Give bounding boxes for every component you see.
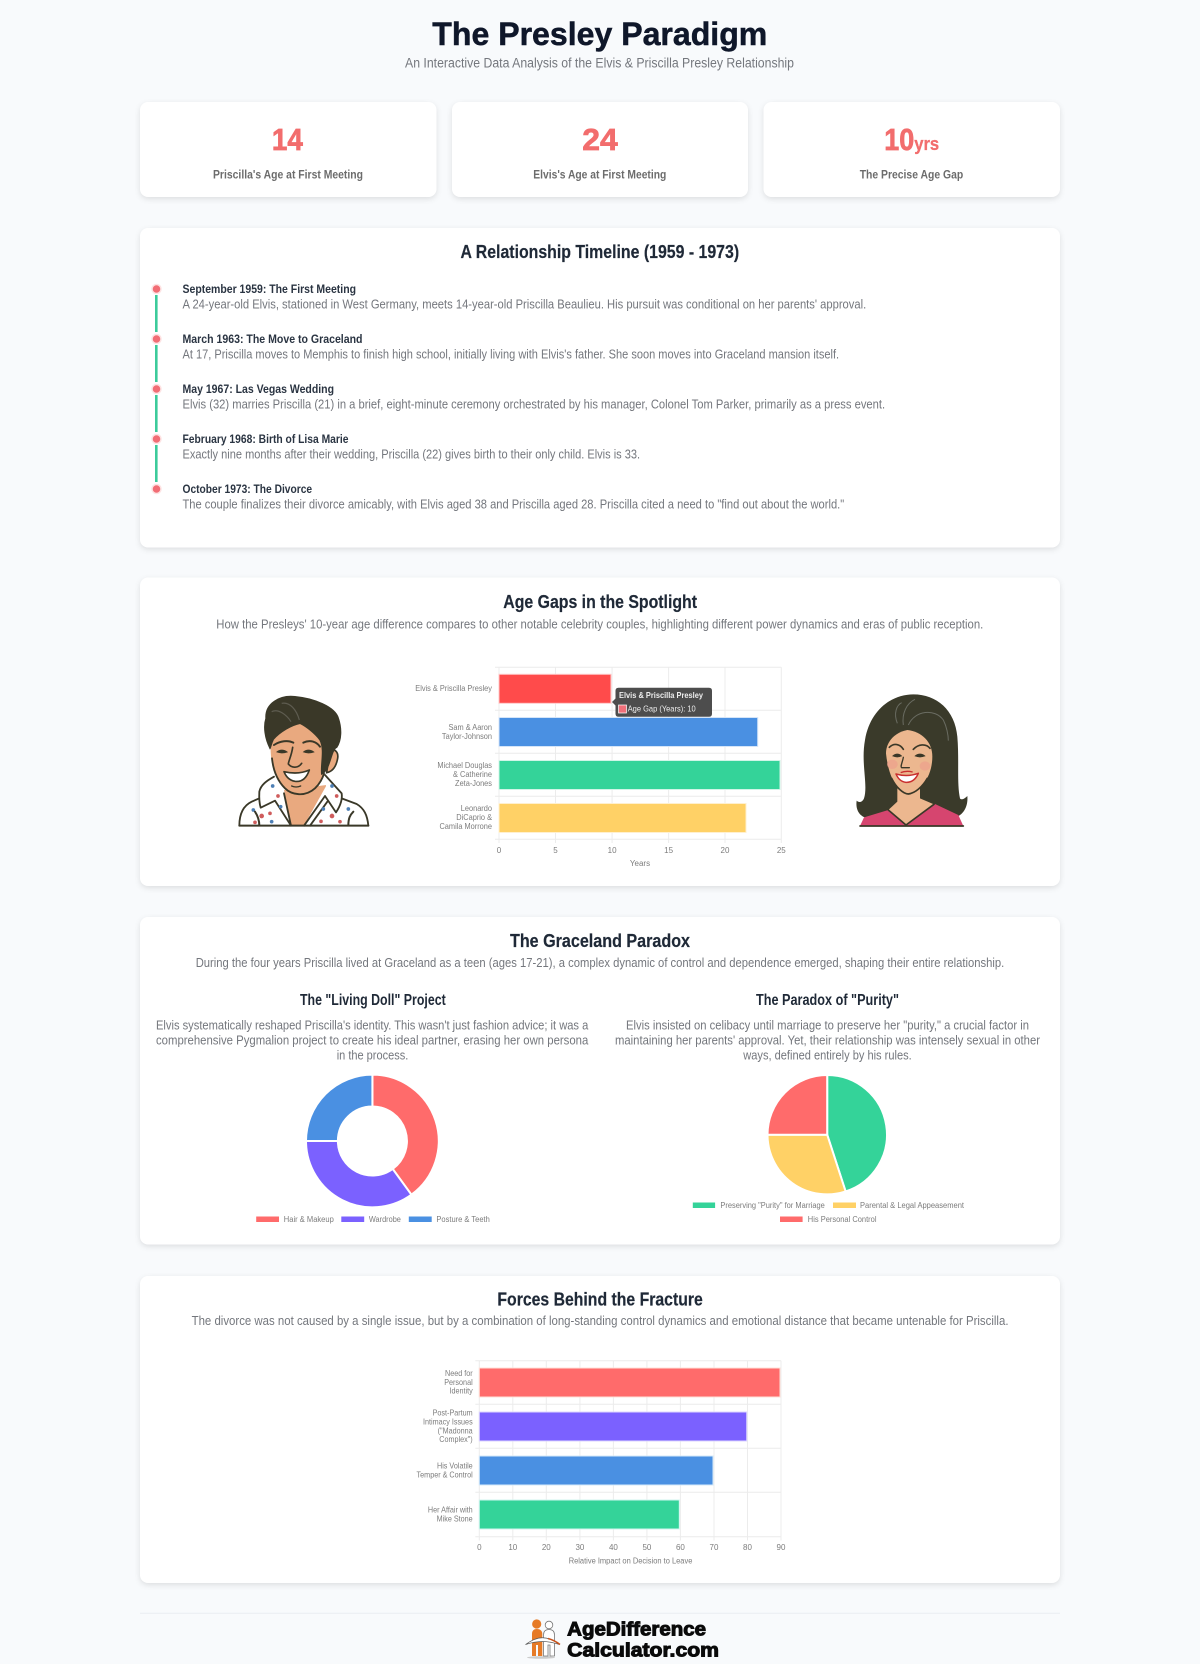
chart axis ticks: 5 bbox=[553, 846, 558, 855]
description: Graceland: During the four years Priscilla lived at Graceland as a teen (ages 17-21), a complex dynamic of control and dependence emerged, shaping their entire relationship. bbox=[196, 956, 1004, 970]
axis title: relative impact: Relative Impact on Decision to Leave bbox=[569, 1556, 693, 1566]
column: paradox of purity bbox=[615, 992, 1040, 1224]
panel: the Graceland paradox bbox=[140, 917, 1060, 1244]
chart category labels: Zeta-Jones bbox=[455, 779, 492, 788]
subheading: purity: The Paradox of "Purity" bbox=[756, 992, 899, 1009]
chart category labels: Mike Stone bbox=[437, 1514, 473, 1523]
chart axis ticks: 20 bbox=[721, 846, 730, 855]
axis title: years: Years bbox=[630, 859, 650, 868]
chart category labels: Personal bbox=[444, 1377, 473, 1387]
chart axis ticks: 50 bbox=[642, 1543, 652, 1552]
chart category labels: Identity bbox=[449, 1386, 473, 1396]
event: move to Graceland bbox=[182, 332, 839, 362]
stat card: Elvis's age bbox=[452, 102, 748, 197]
chart category labels: Intimacy Issues bbox=[423, 1417, 473, 1427]
chart category labels: Need for bbox=[445, 1369, 473, 1378]
stat card: Priscilla's age: Priscilla's Age at First Meeting bbox=[213, 168, 363, 182]
description: age gaps: How the Presleys' 10-year age difference compares to other notable celebrity couples, highlighting different power dynamics and eras of public reception. bbox=[216, 618, 983, 632]
event: wedding: Elvis (32) marries Priscilla (21) in a brief, eight-minute ceremony orchestrated by his manager, Colonel Tom Parker, primarily as a press event. bbox=[182, 398, 885, 412]
chart category labels: Elvis & Priscilla Presley bbox=[415, 684, 492, 693]
subtitle: An Interactive Data Analysis of the Elvis & Priscilla Presley Relationship bbox=[405, 56, 794, 70]
chart category labels: Camila Morrone bbox=[439, 822, 493, 831]
chart category labels: Leonardo bbox=[461, 804, 493, 813]
heading: age gaps: Age Gaps in the Spotlight bbox=[503, 592, 697, 612]
panel: forces behind the fracture bbox=[140, 1276, 1060, 1583]
event: divorce bbox=[182, 482, 844, 512]
chart axis ticks bbox=[497, 846, 786, 855]
footer logo bbox=[526, 1619, 719, 1662]
chart category labels: Sam & Aaron bbox=[448, 722, 492, 732]
donut chart: living doll bbox=[306, 1075, 439, 1207]
heading: forces: Forces Behind the Fracture bbox=[497, 1290, 703, 1310]
wordmark: Calculator.com bbox=[567, 1641, 719, 1662]
pie chart: purity bbox=[768, 1075, 887, 1194]
stat card: Priscilla's age bbox=[140, 102, 436, 197]
timeline dots bbox=[152, 284, 161, 494]
event: first meeting: September 1959: The First Meeting bbox=[182, 282, 356, 296]
stat card: age gap: yrs bbox=[914, 134, 939, 154]
chart category labels: & Catherine bbox=[453, 770, 493, 779]
event: divorce: The couple finalizes their divorce amicably, with Elvis aged 38 and Priscilla aged 28. Priscilla cited a need to "find out about the world." bbox=[182, 498, 844, 512]
chart axis ticks: 60 bbox=[676, 1543, 685, 1552]
legend: pie: Preserving "Purity" for Marriage bbox=[720, 1201, 825, 1210]
event: birth of Lisa Marie: Exactly nine months after their wedding, Priscilla (22) gives birth to their only child. Elvis is 33. bbox=[182, 448, 640, 462]
chart category labels: Complex") bbox=[439, 1435, 473, 1444]
event: first meeting: A 24-year-old Elvis, stationed in West Germany, meets 14-year-old Priscilla Beaulieu. His pursuit was conditional on her parents' approval. bbox=[182, 298, 866, 312]
chart axis ticks: 30 bbox=[575, 1543, 585, 1552]
chart category labels: His Volatile bbox=[437, 1461, 473, 1471]
chart axis ticks: 70 bbox=[710, 1543, 719, 1552]
chart axis ticks: 10 bbox=[508, 1543, 518, 1552]
paragraph: living doll: in the process. bbox=[337, 1048, 408, 1062]
legend: donut: Posture & Teeth bbox=[436, 1215, 490, 1224]
chart axis ticks: 80 bbox=[743, 1543, 752, 1552]
tooltip: Age Gap (Years): 10 bbox=[628, 703, 696, 713]
event: birth of Lisa Marie bbox=[182, 432, 640, 462]
chart category labels: Her Affair with bbox=[428, 1505, 473, 1515]
chart category labels: Michael Douglas bbox=[437, 760, 492, 770]
subheading: living doll: The "Living Doll" Project bbox=[300, 992, 446, 1009]
paragraph: living doll: comprehensive Pygmalion project to create his ideal partner, erasing her own persona bbox=[156, 1033, 588, 1047]
paragraph: living doll: Elvis systematically reshaped Priscilla's identity. This wasn't just fashion advice; it was a bbox=[156, 1018, 588, 1032]
stat card: age gap: The Precise Age Gap bbox=[860, 168, 963, 182]
heading: timeline: A Relationship Timeline (1959 - 1973) bbox=[460, 242, 739, 262]
chart axis ticks bbox=[477, 1543, 786, 1552]
heading: Graceland: The Graceland Paradox bbox=[510, 931, 690, 951]
event: divorce: October 1973: The Divorce bbox=[182, 482, 312, 496]
stat card: age gap bbox=[764, 102, 1060, 197]
bar chart: forces bbox=[417, 1361, 786, 1566]
event: move to Graceland: At 17, Priscilla moves to Memphis to finish high school, initially living with Elvis's father. She soon moves into Graceland mansion itself. bbox=[182, 348, 839, 362]
paragraph: purity bbox=[615, 1018, 1040, 1062]
chart category labels bbox=[415, 684, 493, 831]
chart axis ticks: 0 bbox=[477, 1543, 482, 1552]
chart axis ticks: 20 bbox=[542, 1543, 551, 1552]
chart axis ticks: 40 bbox=[609, 1543, 618, 1552]
event: first meeting bbox=[182, 282, 866, 312]
bar chart: age gaps bbox=[415, 667, 786, 868]
legend: donut bbox=[256, 1215, 490, 1224]
chart category labels: DiCaprio & bbox=[456, 813, 493, 822]
illustration: Priscilla portrait bbox=[856, 694, 967, 826]
wordmark bbox=[567, 1620, 719, 1662]
description: forces: The divorce was not caused by a single issue, but by a combination of long-standing control dynamics and emotional distance that became untenable for Priscilla. bbox=[192, 1314, 1009, 1328]
paragraph: living doll bbox=[156, 1018, 588, 1062]
chart category labels: Post-Partum bbox=[433, 1408, 473, 1418]
stat card: age gap: 10 bbox=[884, 122, 914, 157]
legend: pie bbox=[693, 1201, 965, 1224]
column: living doll project bbox=[156, 992, 588, 1224]
chart category labels bbox=[417, 1369, 473, 1523]
chart axis ticks: 90 bbox=[777, 1543, 786, 1552]
stat card: Elvis's age: Elvis's Age at First Meeting bbox=[533, 168, 666, 182]
chart category labels: Temper & Control bbox=[417, 1470, 473, 1480]
legend: donut: Wardrobe bbox=[369, 1215, 401, 1224]
paragraph: purity: maintaining her parents' approval. Yet, their relationship was intensely sexual in other bbox=[615, 1033, 1040, 1047]
chart axis ticks: 10 bbox=[608, 846, 617, 855]
stat card: Elvis's age: 24 bbox=[582, 122, 619, 157]
tooltip bbox=[612, 688, 712, 717]
chart axis ticks: 15 bbox=[664, 846, 674, 855]
legend: donut: Hair & Makeup bbox=[284, 1215, 334, 1224]
event: wedding: May 1967: Las Vegas Wedding bbox=[182, 382, 334, 396]
event: wedding bbox=[182, 382, 885, 412]
panel: age gaps in the spotlight bbox=[140, 578, 1060, 886]
panel: relationship timeline bbox=[140, 228, 1060, 548]
stat card: Priscilla's age: 14 bbox=[272, 122, 304, 157]
chart axis ticks: 25 bbox=[777, 846, 786, 855]
chart axis ticks: 0 bbox=[497, 846, 502, 855]
chart category labels: Taylor-Johnson bbox=[442, 731, 492, 741]
wordmark: AgeDifference bbox=[567, 1620, 706, 1641]
tooltip: Elvis & Priscilla Presley bbox=[619, 690, 703, 700]
event: birth of Lisa Marie: February 1968: Birth of Lisa Marie bbox=[182, 432, 349, 446]
timeline connector lines bbox=[155, 295, 158, 482]
event: move to Graceland: March 1963: The Move to Graceland bbox=[182, 332, 362, 346]
legend: pie: Parental & Legal Appeasement bbox=[860, 1201, 965, 1210]
title: The Presley Paradigm bbox=[432, 16, 767, 52]
paragraph: purity: ways, defined entirely by his rules. bbox=[742, 1048, 912, 1062]
chart category labels: ("Madonna bbox=[438, 1426, 473, 1436]
icon: couple logo bbox=[526, 1619, 560, 1659]
illustration: Elvis portrait bbox=[239, 696, 368, 826]
legend: pie: His Personal Control bbox=[808, 1215, 877, 1224]
paragraph: purity: Elvis insisted on celibacy until marriage to preserve her "purity," a crucial factor in bbox=[626, 1018, 1029, 1032]
